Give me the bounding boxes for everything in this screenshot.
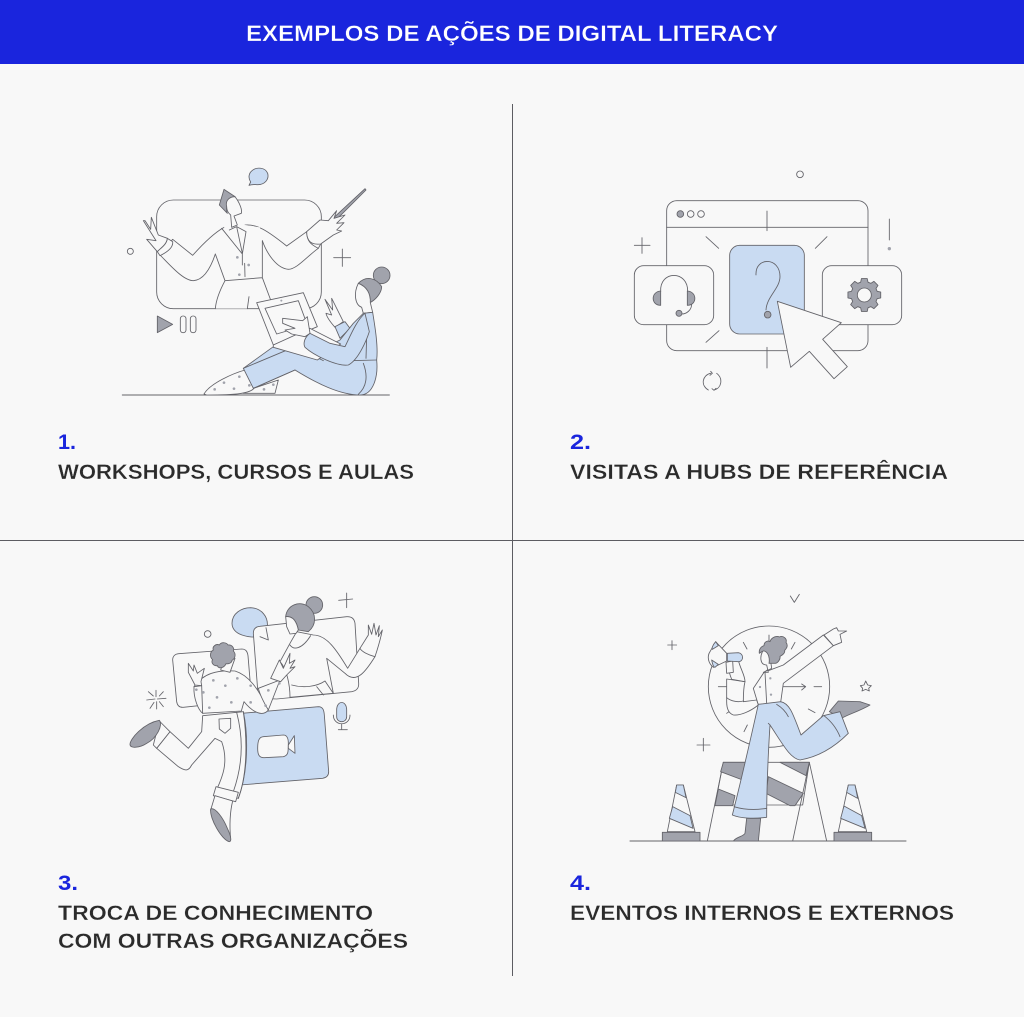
number 1: 1. (58, 430, 76, 454)
header banner (0, 0, 1024, 64)
number 3: 3. (58, 871, 78, 895)
heading: workshops: WORKSHOPS, CURSOS E AULAS (58, 460, 414, 484)
number 2: 2. (570, 430, 591, 454)
panel: knowledge exchange (58, 593, 408, 953)
panel: events (570, 594, 954, 925)
panel: hubs (570, 171, 948, 484)
heading: events: EVENTOS INTERNOS E EXTERNOS (570, 901, 954, 925)
heading line 2: COM OUTRAS ORGANIZAÇÕES (58, 928, 408, 953)
illustration: woman with megaphone jumping a barrier (630, 594, 906, 841)
illustration: browser window with help icons (634, 171, 902, 390)
illustration: teacher on screen and seated student (122, 168, 390, 395)
heading: hubs: VISITAS A HUBS DE REFERÊNCIA (570, 459, 948, 484)
title: EXEMPLOS DE AÇÕES DE DIGITAL LITERACY (246, 21, 778, 46)
heading: knowledge exchange: TROCA DE CONHECIMENTO (58, 901, 373, 925)
panel: workshops (58, 168, 414, 484)
illustration: two people meeting through video screens (130, 593, 382, 842)
number 4: 4. (570, 871, 591, 895)
